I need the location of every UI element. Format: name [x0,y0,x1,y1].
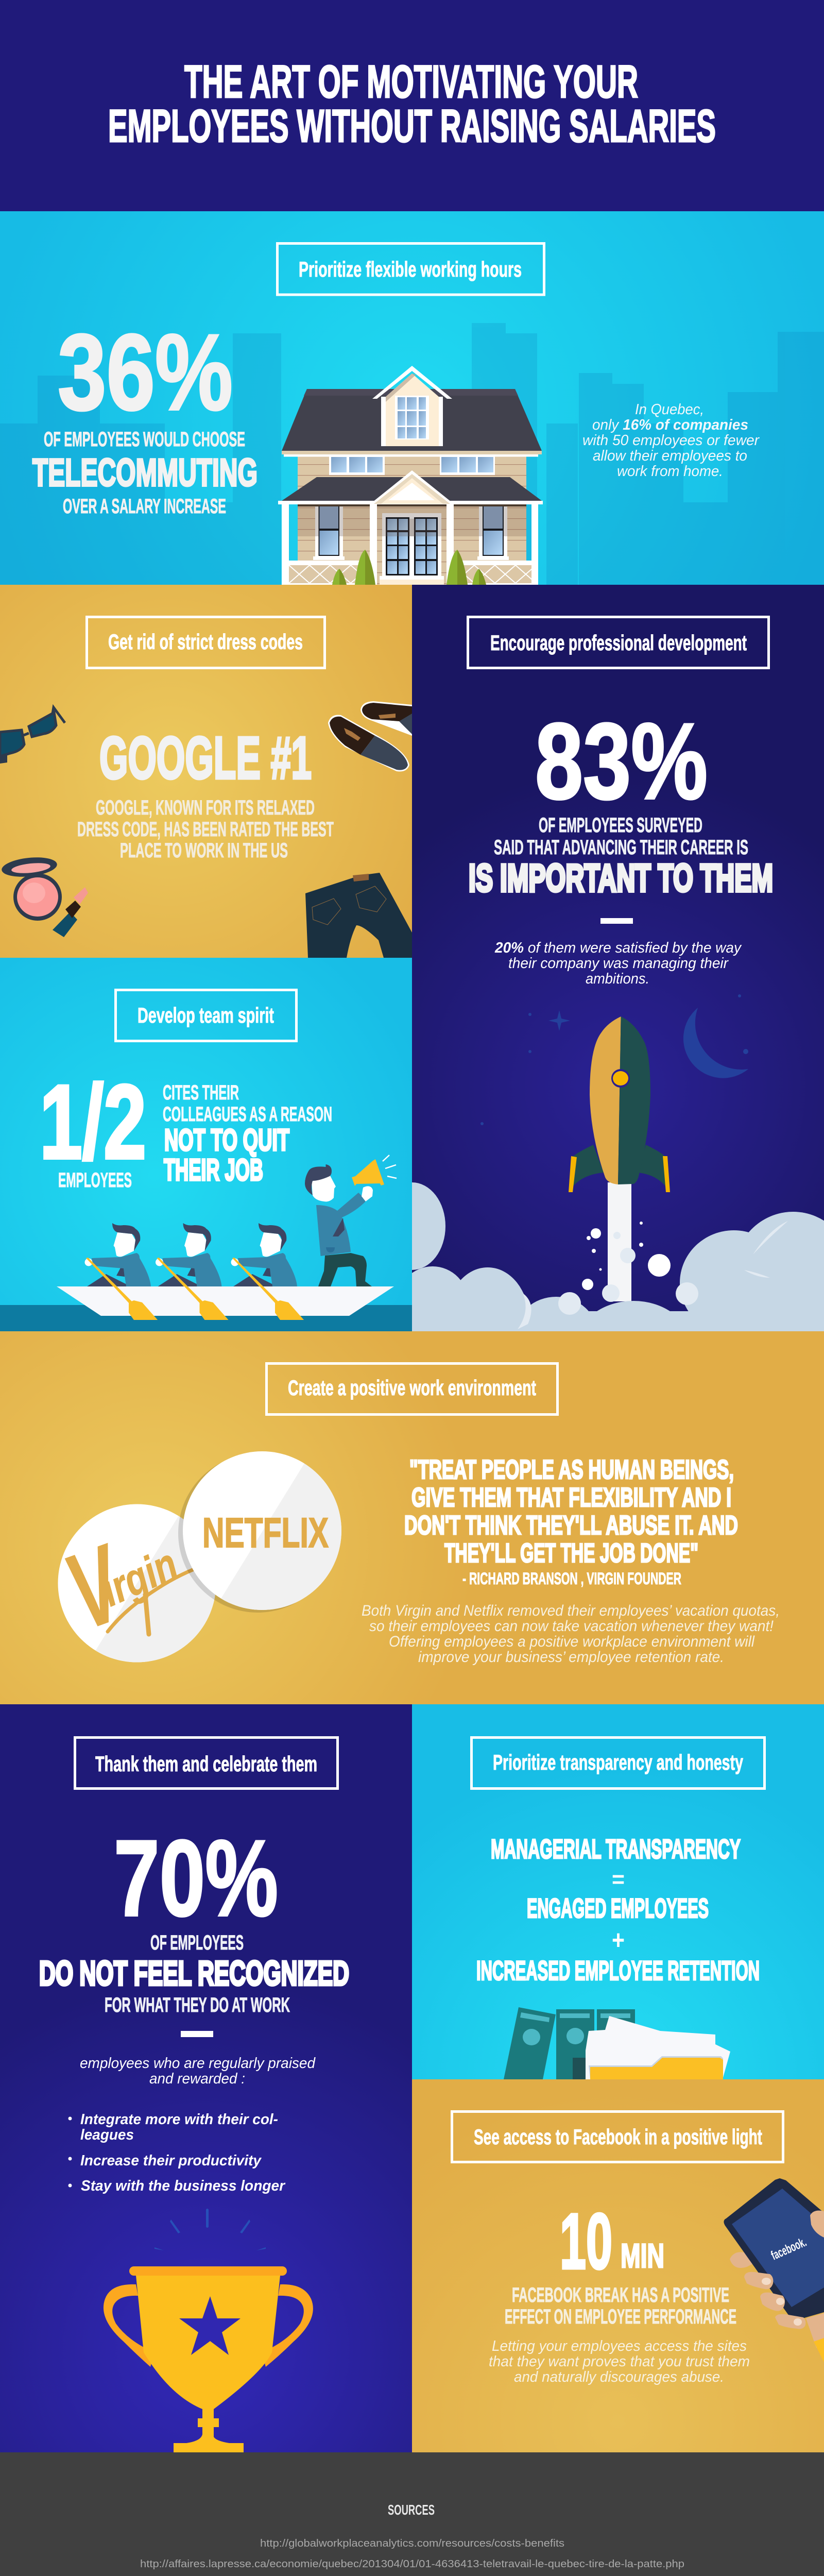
text: trust note [489,2338,750,2385]
quote [404,1455,738,1588]
text: satisfied note: 20% of them were satisfied by the way [494,940,742,956]
logo wordmark: irgin [94,1539,185,1616]
quote: - RICHARD BRANSON , VIRGIN FOUNDER [462,1569,681,1588]
text: satisfied note [494,940,742,987]
text: Quebec note [582,401,760,480]
equation text [476,1834,760,1986]
heading box [75,1737,338,1789]
logo: Netflix: NETFLIX [202,1510,329,1556]
icon: boat [57,1286,394,1316]
stat: 1/2 employees [40,1063,146,1192]
stat: 10 min: MIN [621,2236,664,2275]
divider dash [600,918,633,924]
text: vacation quotas: Offering employees a positive workplace environment will [389,1633,755,1650]
heading box: Thank them and celebrate them [95,1752,317,1776]
text: not to quit: THEIR JOB [164,1153,263,1187]
heading box [267,1363,557,1415]
icon: rowers [84,1223,304,1320]
source links: http://affaires.lapresse.ca/economie/quebec/201304/01/01-4636413-teletravail-le-quebec-tire-de-la-patte.php [140,2558,684,2570]
water [0,1305,412,1331]
logo: Netflix [178,1451,341,1613]
heading box [277,243,544,295]
source links: http://globalworkplaceanalytics.com/resources/costs-benefits [260,2538,564,2549]
icon: clouds [412,1182,824,1331]
icon: rocket [569,1016,670,1301]
stat: 83% [469,701,773,900]
divider dash [181,2031,213,2037]
text: praised employees [80,2055,316,2087]
stat: 10 min: 10 [560,2197,612,2285]
heading box [87,617,324,668]
icon: standing man with megaphone [305,1155,397,1286]
icon: binders and folder [504,2007,730,2079]
text: vacation quotas [362,1602,780,1666]
panel: sources [0,2452,824,2576]
panel: thank and celebrate [0,1704,412,2453]
icon: oars [110,1283,304,1320]
stat: Google #1: GOOGLE, KNOWN FOR ITS RELAXED [96,796,315,819]
stat: 70%: DO NOT FEEL RECOGNIZED [39,1954,349,1993]
logo wordmark: V [52,1521,141,1652]
heading box: Develop team spirit [138,1003,274,1027]
heading box [472,1737,764,1789]
stat: 1/2 employees: 1/2 [40,1063,146,1181]
icon: sunglasses [0,707,65,764]
bullet list: leagues [80,2127,134,2143]
text: Quebec note: work from home. [617,463,723,480]
text: trust note: that they want proves that you trust them [489,2353,750,2370]
stat: 70%: 70% [114,1818,278,1939]
heading: sources: SOURCES [388,2502,435,2518]
text: vacation quotas: Both Virgin and Netflix removed their employees’ vacation quotas, [362,1602,780,1619]
bullet list [68,2111,286,2194]
text: not to quit [163,1081,332,1187]
panel: professional development [412,585,824,1331]
heading box [468,617,768,668]
panel: positive work environment [0,1331,824,1704]
heading box: Create a positive work environment [288,1376,536,1400]
icon: hand holding phone [724,2178,824,2362]
stat: 70%: OF EMPLOYEES [150,1931,244,1954]
icon: shoes [328,701,412,772]
text: Quebec note: In Quebec, [635,401,704,418]
stat: 10 min [505,2197,736,2328]
stat: 70% [39,1818,349,2016]
text: praised employees: and rewarded : [149,2071,245,2087]
panel: team spirit [0,958,412,1331]
stat: Google #1: GOOGLE #1 [99,724,312,791]
heading box: Prioritize flexible working hours [299,257,522,281]
stat: 36%: OF EMPLOYEES WOULD CHOOSE [44,428,245,451]
stat: 36%: TELECOMMUTING [32,451,258,494]
stat: 36%: OVER A SALARY INCREASE [63,495,226,518]
heading box [115,990,297,1041]
text: vacation quotas: improve your business’ employee retention rate. [418,1649,724,1666]
icon: house [278,366,543,585]
text: not to quit: CITES THEIR [163,1081,239,1104]
panel: flexible working hours [0,211,824,585]
text: Quebec note: with 50 employees or fewer [582,432,760,449]
header panel [0,0,824,211]
text: vacation quotas: so their employees can now take vacation whenever they want! [369,1618,774,1635]
text: Quebec note: allow their employees to [593,448,747,464]
stat: 83%: OF EMPLOYEES SURVEYED [539,814,702,837]
stat: Google #1: DRESS CODE, HAS BEEN RATED THE BEST [77,818,334,841]
text: not to quit: COLLEAGUES AS A REASON [163,1103,332,1126]
logo: Virgin [58,1504,215,1662]
bullet list: Increase their productivity [80,2153,262,2169]
text: not to quit: NOT TO QUIT [164,1123,289,1157]
stat: 83%: 83% [535,701,708,822]
stat: 36%: 36% [58,312,233,433]
text: trust note: Letting your employees access the sites [492,2338,747,2354]
bullet list: Integrate more with their col- [80,2111,278,2128]
text: praised employees: employees who are regularly praised [80,2055,316,2072]
text: trust note: and naturally discourages abuse. [514,2369,724,2385]
equation text: = [612,1866,625,1892]
stat: 36% [32,312,258,518]
stat: Google #1: PLACE TO WORK IN THE US [120,839,288,862]
bullet list: Stay with the business longer [81,2178,286,2194]
panel: dress codes [0,585,412,958]
icon: makeup compact and lipstick [1,855,88,937]
text: satisfied note: ambitions. [586,971,649,987]
panel: transparency and honesty [412,1704,824,2079]
heading box [452,2111,783,2162]
source links [140,2538,684,2576]
icon: exhaust bubbles [582,1222,671,1290]
icon: trophy [104,2209,313,2453]
stat: Google #1 [77,724,334,862]
icon: night sky [480,994,748,1125]
equation text: + [612,1925,625,1955]
text: satisfied note: their company was managing their [508,955,729,972]
panel: Facebook access [412,2079,824,2453]
stat: 70%: FOR WHAT THEY DO AT WORK [105,1994,290,2016]
text: Quebec note: only 16% of companies [592,417,748,433]
stat: 1/2 employees: EMPLOYEES [58,1169,132,1192]
heading box: Get rid of strict dress codes [108,630,303,654]
title [108,56,716,151]
icon: jeans [305,873,412,958]
